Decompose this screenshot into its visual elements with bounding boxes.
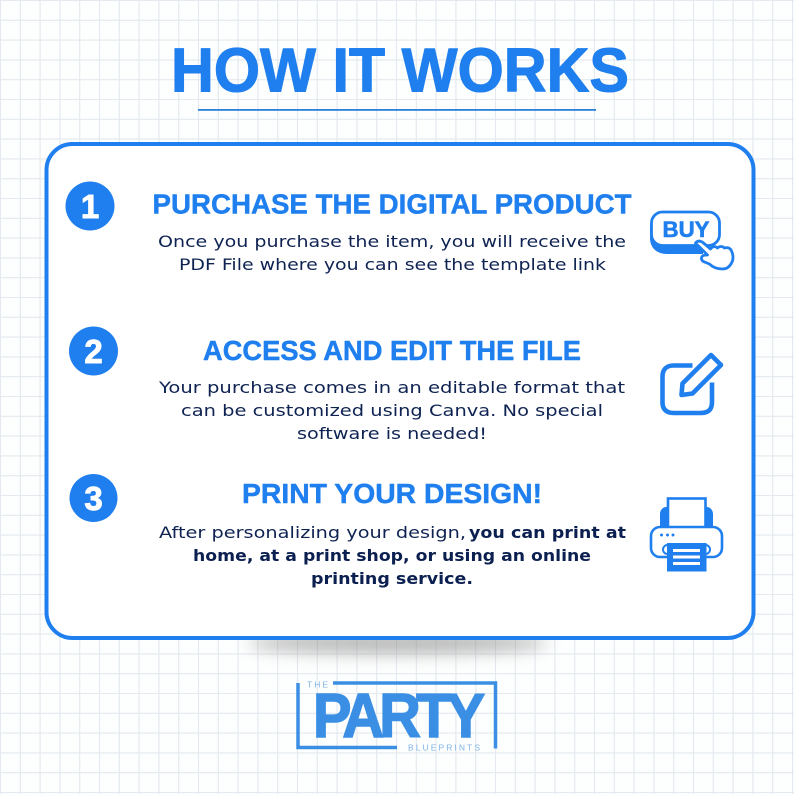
panel: steps card — [46, 144, 754, 638]
text: step 2 description — [158, 378, 625, 443]
text: step 1 description — [158, 232, 626, 274]
number badge 1: 1 — [81, 188, 99, 225]
title: HOW IT WORKS — [171, 36, 629, 106]
icon: printer — [651, 498, 722, 572]
text: step 1 description: PDF File where you can see the template link — [179, 255, 607, 274]
heading: step 3: PRINT YOUR DESIGN! — [242, 478, 542, 509]
text: step 2 description: Your purchase comes in an editable format that — [158, 378, 625, 397]
logo: BLUEPRINTS: BLUEPRINTS — [408, 742, 480, 752]
icon: edit pencil — [662, 355, 721, 413]
step 2 — [69, 326, 721, 443]
icon: buy button: BUY — [662, 217, 710, 242]
logo — [298, 680, 496, 752]
text: step 1 description: Once you purchase the item, you will receive the — [158, 232, 626, 251]
text: step 3 description: home, at a print shop, or using an online — [193, 546, 591, 565]
icon: buy button — [650, 212, 733, 269]
logo: THE: THE — [307, 680, 328, 690]
text: step 3 description: you can print at — [469, 523, 626, 542]
card shadow — [248, 632, 548, 654]
number badge 3 — [70, 474, 118, 522]
heading: step 2: ACCESS AND EDIT THE FILE — [203, 335, 581, 366]
text: step 2 description: can be customized using Canva. No special — [181, 401, 603, 420]
number badge 2 — [69, 326, 118, 376]
heading: step 1: PURCHASE THE DIGITAL PRODUCT — [152, 188, 632, 220]
text: step 3 description: printing service. — [311, 569, 473, 588]
step 3 — [70, 474, 722, 588]
number badge 3: 3 — [84, 480, 103, 517]
step 1 — [66, 182, 733, 274]
number badge 1 — [66, 182, 114, 230]
logo: PARTY: PARTY — [313, 681, 485, 750]
text: step 2 description: software is needed! — [297, 424, 487, 443]
text: step 3 description: After personalizing your design, — [159, 523, 466, 542]
text: step 3 description — [159, 523, 626, 588]
number badge 2: 2 — [84, 333, 103, 370]
